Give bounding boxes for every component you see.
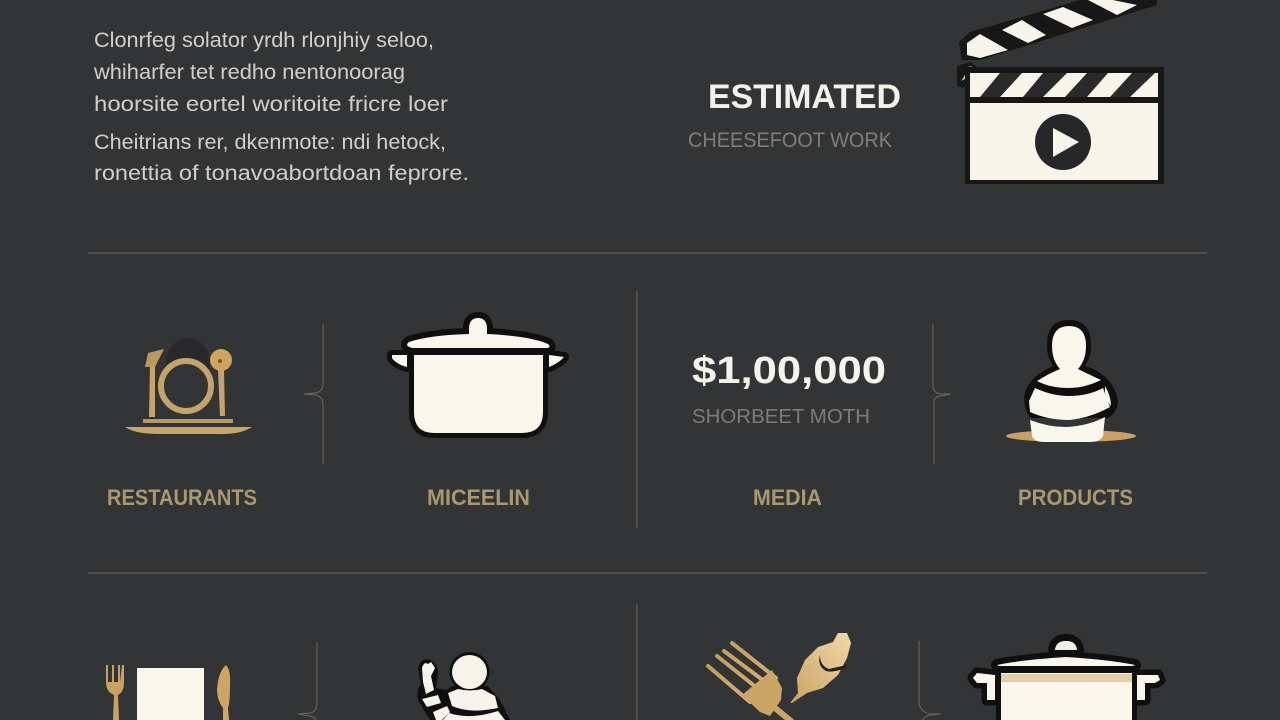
heading: estimated: ESTIMATED bbox=[708, 78, 901, 116]
icon: michelin figure on gold base bbox=[1006, 320, 1136, 442]
divider bracket: row one left bbox=[304, 324, 323, 464]
divider bracket: row two left bbox=[298, 642, 317, 720]
label: media: MEDIA bbox=[753, 485, 822, 510]
icon: michelin figure waving bbox=[417, 652, 510, 720]
icon: fork and dumpling bbox=[708, 633, 851, 720]
icon: fork, menu card and knife bbox=[106, 665, 230, 720]
text block: intro paragraph: hoorsite eortel woritoite fricre loer bbox=[94, 93, 448, 116]
divider bracket: row one right bbox=[933, 324, 951, 464]
text block: intro paragraph: ronettia of tonavoabortdoan feprore. bbox=[94, 162, 469, 185]
stat: value: $1,00,000 bbox=[692, 350, 886, 392]
text block: intro paragraph: Cheitrians rer, dkenmote: ndi hetock, bbox=[94, 131, 446, 154]
caption: net worth: CHEESEFOOT WORK bbox=[688, 129, 892, 152]
text block: intro paragraph: whiharfer tet redho nentonoorag bbox=[93, 61, 405, 84]
icon: plate and cutlery bbox=[125, 338, 252, 434]
text block: intro paragraph bbox=[93, 29, 469, 185]
divider bracket: row two right bbox=[919, 641, 941, 720]
icon: clapperboard bbox=[957, 0, 1164, 184]
icon: large stock pot bbox=[973, 641, 1160, 720]
icon: cooking pot bbox=[392, 318, 564, 433]
label: products: PRODUCTS bbox=[1018, 485, 1133, 510]
stat: caption: SHORBEET MOTH bbox=[692, 406, 870, 428]
label: restaurants: RESTAURANTS bbox=[107, 485, 257, 510]
label: michelin: MICEELIN bbox=[427, 485, 530, 510]
text block: intro paragraph: Clonrfeg solator yrdh rlonjhiy seloo, bbox=[94, 29, 434, 52]
